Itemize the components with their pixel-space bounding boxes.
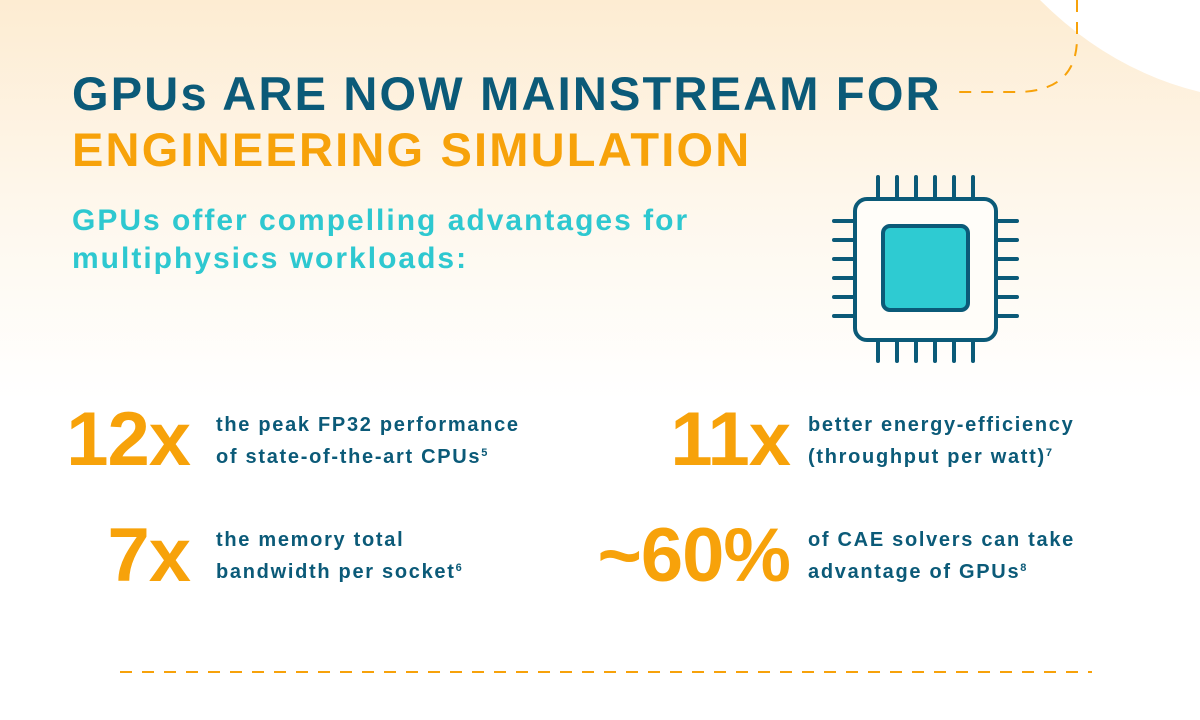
text: 7x	[107, 513, 190, 598]
text: 12x	[66, 397, 190, 482]
stat: 11x	[670, 397, 1074, 482]
text: the memory total	[216, 529, 404, 551]
text: of state-of-the-art CPUs5	[216, 446, 489, 468]
text: of CAE solvers can take	[808, 529, 1075, 551]
subtitle: multiphysics workloads:	[72, 242, 468, 275]
title line 2: ENGINEERING SIMULATION	[72, 123, 751, 176]
text: bandwidth per socket6	[216, 561, 463, 583]
text: the peak FP32 performance	[216, 414, 520, 436]
icon: chip	[832, 175, 1019, 363]
subtitle: GPUs offer compelling advantages for	[72, 204, 689, 237]
stat: 12x	[66, 397, 520, 482]
stat: 7x	[107, 513, 463, 598]
text: better energy-efficiency	[808, 414, 1074, 436]
text: (throughput per watt)7	[808, 446, 1054, 468]
text: 11x	[670, 397, 790, 482]
text: advantage of GPUs8	[808, 561, 1028, 583]
stat: ~60%	[598, 513, 1075, 598]
title: GPUs ARE NOW MAINSTREAM FOR	[72, 67, 942, 120]
subtitle	[72, 204, 689, 275]
text: ~60%	[598, 513, 790, 598]
